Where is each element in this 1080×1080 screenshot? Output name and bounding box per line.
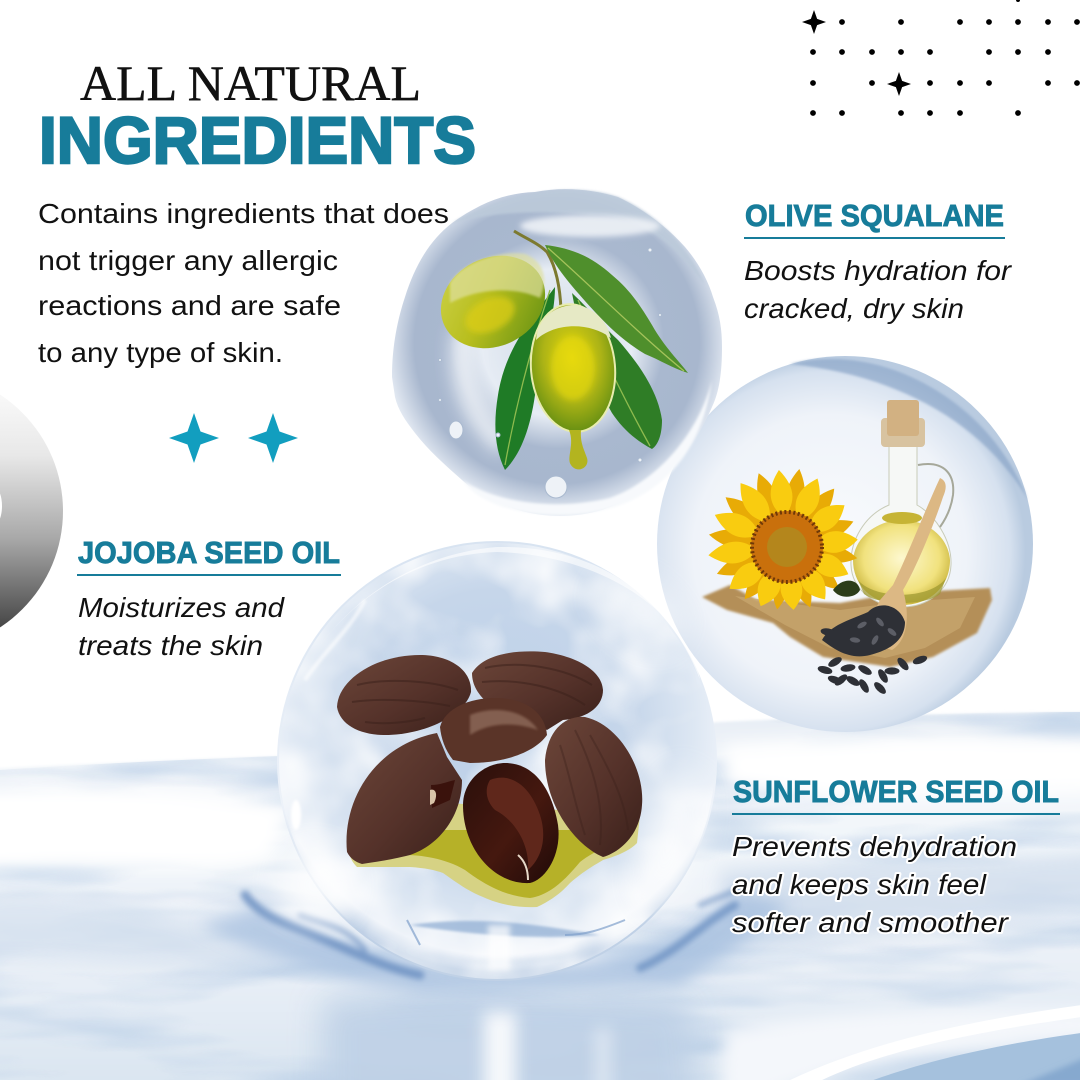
label: olive squalane — [744, 198, 1013, 324]
dot pattern with black stars — [802, 0, 1080, 116]
sunflower petals — [707, 468, 859, 611]
olive stem — [514, 231, 561, 310]
label: olive squalane: cracked, dry skin — [744, 293, 964, 324]
water droplets — [438, 248, 662, 498]
wooden spoon — [860, 478, 946, 650]
label: sunflower seed oil: SUNFLOWER SEED OIL — [733, 774, 1059, 809]
burlap — [702, 585, 992, 667]
label: jojoba seed oil: Moisturizes and — [78, 592, 285, 623]
jojoba seeds — [337, 651, 642, 883]
intro paragraph: reactions and are safe — [38, 290, 341, 321]
bubble: olive squalane — [392, 189, 722, 516]
olive left — [425, 238, 561, 366]
sunflower leaf — [833, 581, 860, 597]
label: jojoba seed oil: JOJOBA SEED OIL — [78, 535, 340, 570]
label: jojoba seed oil: treats the skin — [78, 630, 263, 661]
label: sunflower seed oil — [732, 774, 1060, 938]
label: sunflower seed oil: softer and smoother — [732, 907, 1010, 938]
ripple strokes — [245, 885, 745, 975]
teal sparkle stars — [169, 413, 298, 463]
title: all natural: ALL NATURAL — [80, 55, 421, 111]
title: ingredients: INGREDIENTS — [39, 103, 476, 177]
intro paragraph: Contains ingredients that does — [38, 198, 449, 229]
oil pool — [348, 800, 640, 907]
decorative gradient sphere — [0, 372, 63, 650]
background water — [0, 712, 1080, 1080]
seeds in spoon and scattered — [817, 605, 928, 696]
bubble: sunflower seed oil — [657, 356, 1033, 732]
intro paragraph: not trigger any allergic — [38, 245, 338, 276]
label: sunflower seed oil: Prevents dehydration — [732, 831, 1017, 862]
bubble: jojoba seed oil — [277, 541, 717, 981]
oil bottle — [851, 400, 953, 607]
label: jojoba seed oil — [77, 535, 341, 661]
olive center — [526, 301, 620, 469]
wave lower right — [780, 1000, 1080, 1080]
label: olive squalane: OLIVE SQUALANE — [745, 198, 1004, 233]
intro paragraph: to any type of skin. — [38, 337, 283, 368]
intro paragraph — [38, 198, 449, 368]
label: olive squalane: Boosts hydration for — [744, 255, 1013, 286]
olive leaves — [545, 245, 688, 373]
label: sunflower seed oil: and keeps skin feel — [732, 869, 987, 900]
